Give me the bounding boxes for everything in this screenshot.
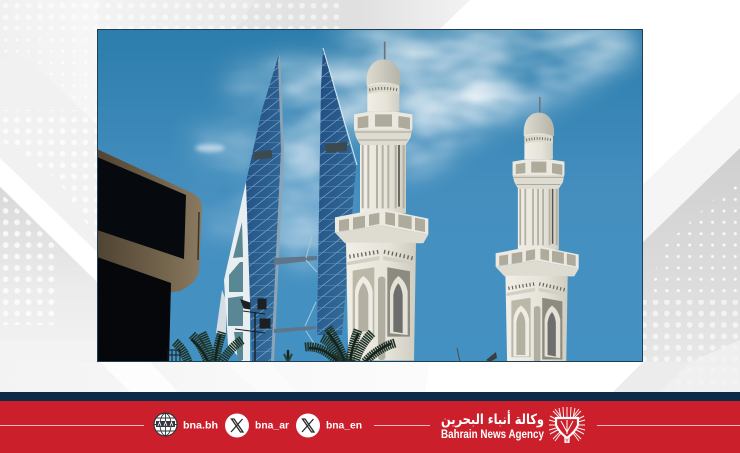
clouds: [190, 28, 630, 260]
sky: [97, 29, 643, 362]
label: Arabic account: bna_ar: [255, 420, 289, 432]
label: English account: bna_en: [326, 420, 362, 432]
cloud wisp: [195, 144, 225, 152]
left tower: [246, 54, 281, 362]
icon: X logo Arabic account: [225, 414, 249, 438]
left tower sail frame: [224, 182, 250, 362]
photo border: [98, 30, 642, 362]
small railing: [168, 350, 180, 362]
tower openings: [253, 142, 347, 160]
dark building: [97, 149, 202, 362]
footer rules: [0, 424, 740, 426]
Bahrain World Trade Center towers: [216, 48, 357, 362]
minaret: right: [496, 97, 579, 381]
sky bridges: [274, 256, 317, 333]
rear white sail: [216, 290, 226, 335]
icon: globe: [154, 413, 177, 436]
floodlight pole: [235, 299, 270, 362]
right tower: [317, 48, 356, 335]
icon: Bahrain News Agency emblem: [549, 407, 585, 443]
turbine struts: [305, 236, 317, 345]
label: website: bna.bh: [183, 420, 218, 432]
distant lamp and dish: [457, 348, 497, 362]
footer bar: [0, 392, 740, 453]
logo text: Arabic agency name: وكالة أنباء البحرين: [441, 410, 544, 428]
icon: X logo English account: [296, 414, 320, 438]
palm trees: [175, 328, 395, 362]
minaret: left: [335, 42, 428, 361]
panel: photo of Bahrain World Trade Center and minarets: [97, 28, 643, 381]
logo text: English agency name: Bahrain News Agency: [441, 427, 544, 441]
